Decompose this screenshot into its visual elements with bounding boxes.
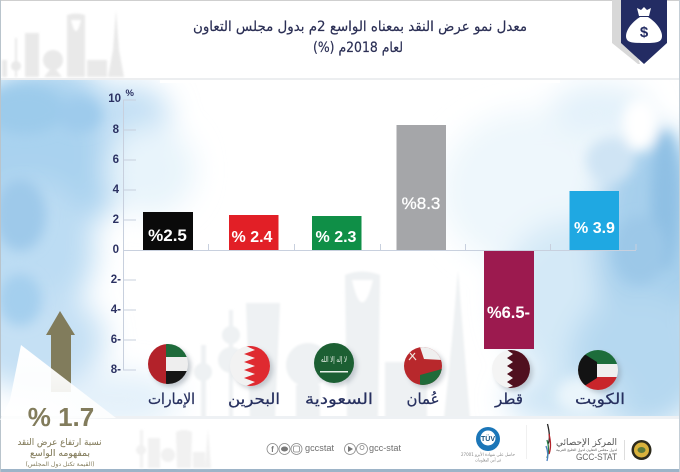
chart: money supply growth bars <box>108 88 636 376</box>
axis lines and ticks <box>123 100 636 370</box>
axis labels: 4 <box>113 184 120 196</box>
axis labels <box>108 88 135 376</box>
bar: Saudi Arabia: % 2.3 <box>316 229 357 246</box>
bar: Kuwait: % 3.9 <box>574 220 615 237</box>
callout: 1.7% macro money growth <box>18 402 102 468</box>
icon: UAE flag <box>148 344 191 387</box>
logo: GCC-STAT statistical centre: GCC-STAT <box>576 452 617 463</box>
social handle: gcc-stat: gcc-stat <box>369 443 401 454</box>
axis labels: 2- <box>111 274 121 286</box>
logo: TUV certification: TÜV <box>481 434 495 443</box>
skyline: header <box>2 10 124 77</box>
callout: 1.7% macro money growth: بمفهومه الواسع <box>30 449 90 459</box>
axis labels: 4- <box>111 304 121 316</box>
icon: Saudi flag: لا إله إلا الله <box>321 355 347 365</box>
panel: watercolor chart background <box>0 65 680 430</box>
logo: GCC-STAT statistical centre: لدول مجلس التعاون لدول الخليج العربية <box>556 448 617 452</box>
axis labels: 0 <box>113 244 119 256</box>
axis labels: 6- <box>111 334 121 346</box>
divider <box>526 425 527 459</box>
title: لعام 2018م (%) <box>313 40 403 56</box>
skyline: chart background <box>194 270 470 418</box>
axis labels: 2 <box>113 214 119 226</box>
skyline: footer <box>136 428 211 468</box>
social handle: gccstat: f <box>271 445 274 454</box>
bar: Kuwait <box>570 191 619 250</box>
country labels: الإمارات <box>148 390 195 408</box>
header band <box>0 0 680 83</box>
icon: Oman flag <box>404 347 445 388</box>
country labels: الكويت <box>575 390 625 408</box>
social handle: gcc-stat <box>344 443 401 454</box>
axis labels: % <box>126 88 135 99</box>
bar: Qatar <box>484 251 534 349</box>
icon: Bahrain flag <box>230 346 273 389</box>
title <box>193 19 527 56</box>
title: معدل نمو عرض النقد بمعناه الواسع 2م بدول مجلس التعاون <box>193 19 527 35</box>
logo: TUV certification: في أمن المعلومات <box>475 456 501 464</box>
icon: Saudi flag <box>314 343 357 386</box>
callout: 1.7% macro money growth: (القيمة تكتل دول المجلس) <box>26 461 94 468</box>
bar: Oman: %8.3 <box>402 194 440 213</box>
bar: UAE: %2.5 <box>148 226 187 245</box>
bar: Qatar: %6.5- <box>487 304 530 322</box>
country labels: قطر <box>494 390 523 408</box>
axis labels: 8- <box>111 364 121 376</box>
white corner tab <box>0 345 116 420</box>
logo: GCC-STAT statistical centre: المركز الإحصائي <box>556 438 617 448</box>
social handle: gccstat <box>267 443 334 454</box>
icon: Qatar flag <box>492 350 533 391</box>
bar: Bahrain: % 2.4 <box>232 229 273 246</box>
country labels: السعودية <box>305 390 373 408</box>
social handle: gccstat: gccstat <box>305 443 334 454</box>
country labels: البحرين <box>228 390 280 408</box>
callout: 1.7% macro money growth: نسبة ارتفاع عرض النقد <box>18 438 102 448</box>
logo: TUV certification: حاصل على شهادة الأيزو 27001 <box>461 451 515 458</box>
icon: money bag badge: $ <box>640 24 649 41</box>
callout: 1.7% macro money growth: % 1.7 <box>28 402 94 432</box>
logo: GCC-STAT statistical centre <box>546 424 625 463</box>
bar: Saudi Arabia <box>312 216 362 250</box>
logo: GCC emblem <box>632 440 652 460</box>
bar: UAE <box>143 212 193 250</box>
country labels: عُمان <box>406 390 440 408</box>
country labels <box>148 390 625 408</box>
arrow: upward growth <box>46 311 75 392</box>
icon: money bag badge <box>612 0 667 64</box>
axis labels: 10 <box>108 93 121 105</box>
axis labels: 6 <box>113 154 119 166</box>
bar: Bahrain <box>229 215 278 250</box>
logo: TUV certification <box>461 427 515 464</box>
bar: Oman <box>396 125 446 250</box>
axis labels: 8 <box>113 124 120 136</box>
icon: Kuwait flag <box>578 350 621 393</box>
